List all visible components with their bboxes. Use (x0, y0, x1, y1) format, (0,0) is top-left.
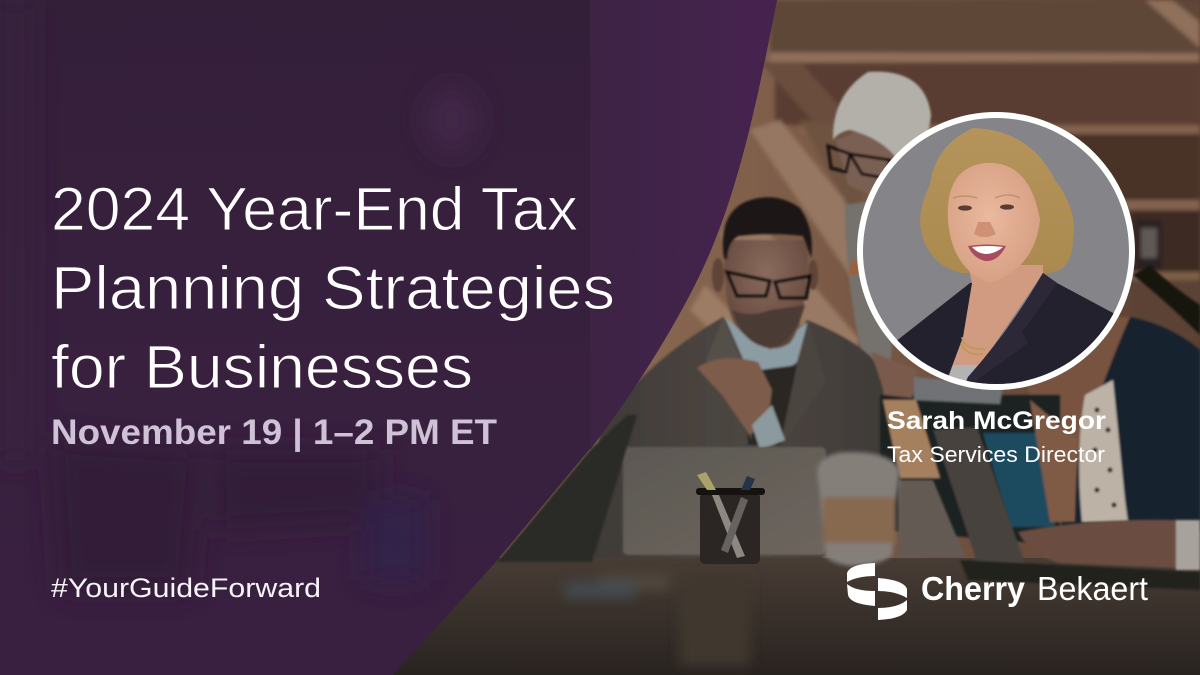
speaker name: Sarah McGregor (887, 407, 1106, 435)
center shirt, blue and orange clothing (871, 352, 1078, 545)
smile (968, 244, 1006, 261)
man with glasses in gray jacket (592, 197, 884, 560)
title (51, 175, 615, 401)
date and time: November 19 | 1–2 PM ET (51, 413, 497, 452)
table (0, 558, 1200, 675)
necklace (961, 337, 985, 354)
face (948, 163, 1040, 283)
hair (920, 128, 1074, 273)
neck and chest (948, 265, 1043, 380)
laptops (497, 415, 1200, 590)
purple panel (0, 0, 777, 675)
blouse (950, 365, 977, 381)
coffee cup (817, 452, 900, 566)
hands on keyboard (1018, 520, 1200, 570)
right woman: navy blazer, ponytail, dotted blouse (1013, 265, 1200, 530)
right blazer side (966, 273, 1114, 384)
Cherry Bekaert logo (847, 563, 1148, 620)
eyes, brows and nose (958, 204, 1014, 211)
speaker role: Tax Services Director (887, 442, 1105, 467)
wood shelves (690, 0, 1200, 380)
logo mark (847, 563, 907, 620)
ghosted photo under purple (0, 0, 478, 590)
pen cup (696, 472, 765, 564)
lapel (968, 273, 1057, 385)
title: Planning Strategies (51, 254, 615, 322)
title: 2024 Year-End Tax (51, 175, 578, 243)
speaker headshot (857, 112, 1135, 395)
logo wordmark: Cherry (921, 570, 1026, 607)
title: for Businesses (51, 333, 473, 401)
hashtag: #YourGuideForward (51, 573, 321, 603)
woman behind: gray hair, glasses, shirt (828, 72, 931, 372)
left blazer side (897, 283, 972, 376)
Cherry Bekaert logo: Bekaert (1037, 570, 1148, 607)
blurred table items (565, 575, 750, 665)
